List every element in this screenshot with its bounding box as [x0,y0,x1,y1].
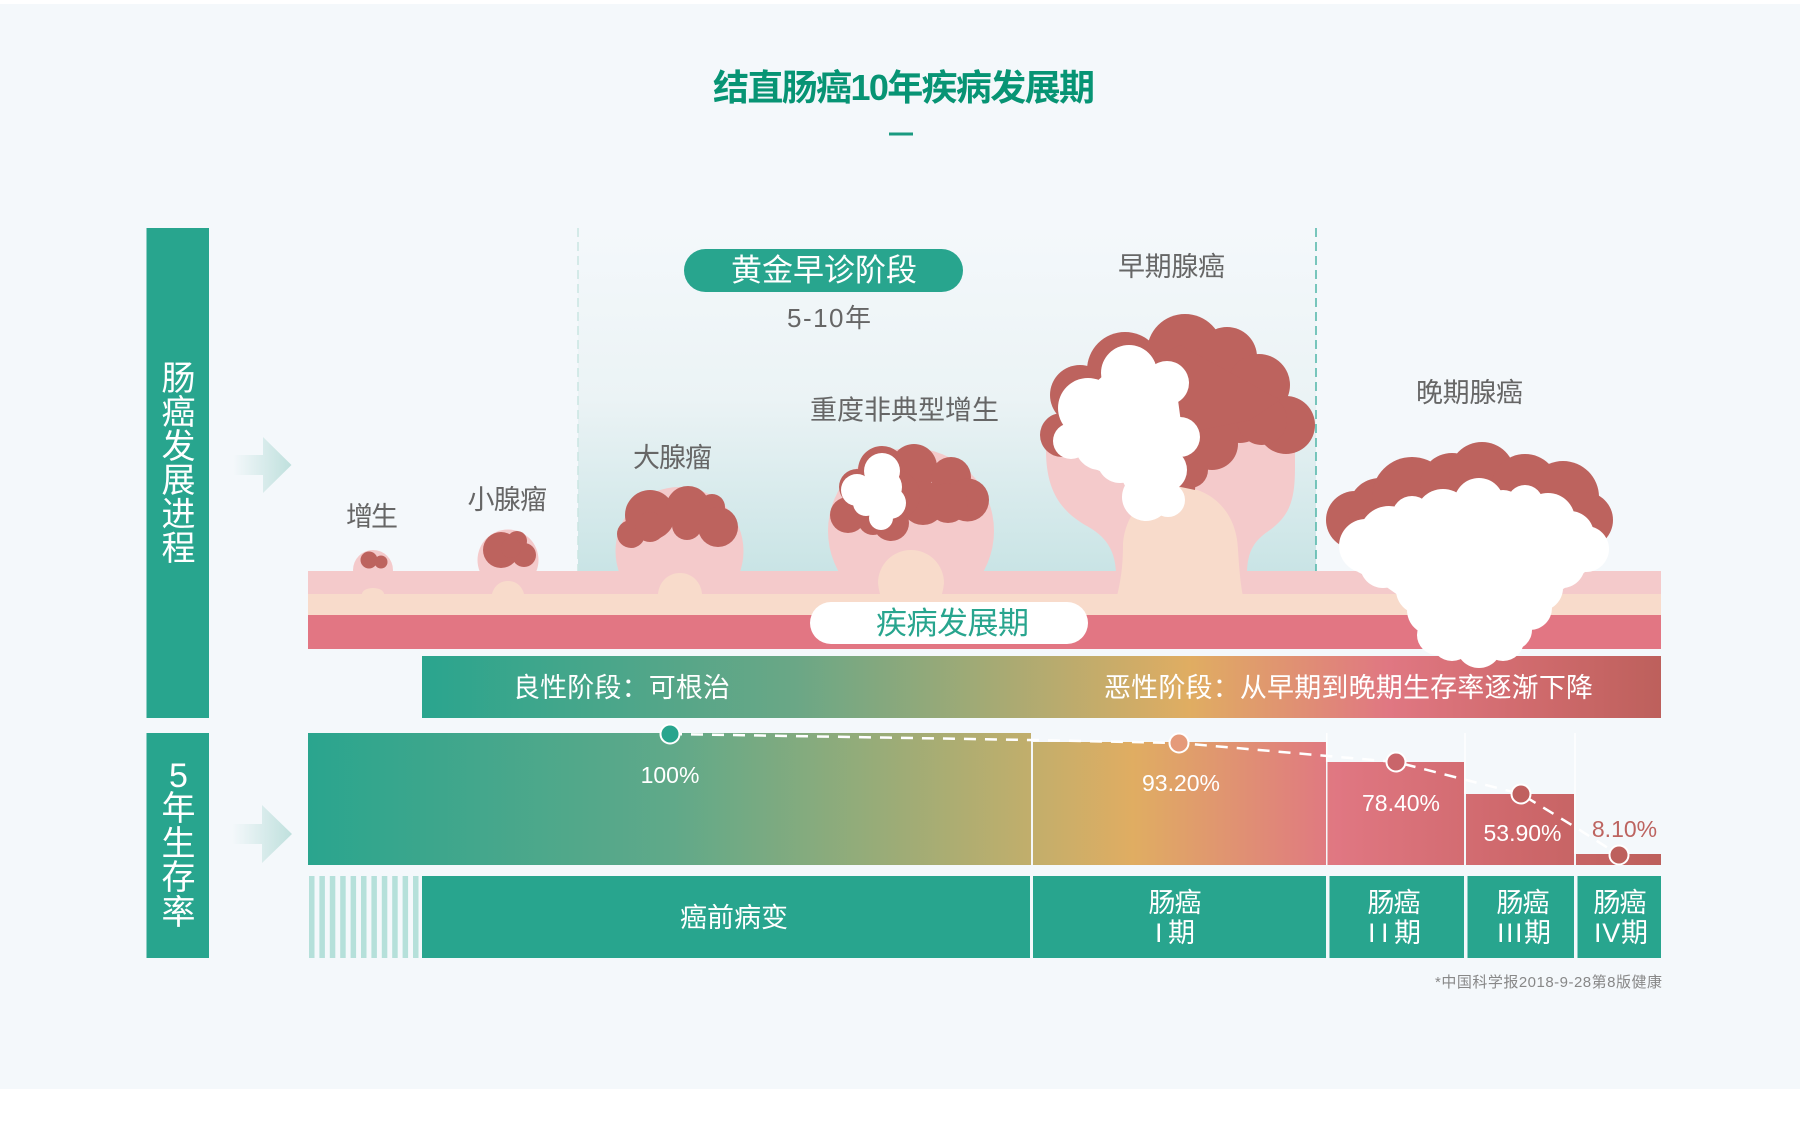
title: 结直肠癌10年疾病发展期 [713,67,1095,108]
polyp: large adenoma [617,486,738,548]
left label: progression: 癌 [162,394,196,432]
golden early diagnosis zone background [578,228,1316,571]
stage labels: 大腺瘤 [633,443,712,473]
stage I: 肠癌 [1148,888,1202,918]
polyp: hyperplasia [360,552,388,568]
stage III: III期 [1497,918,1551,948]
stage II [1330,876,1464,958]
polyp: severe atypical hyperplasia [830,444,989,541]
left label: progression: 展 [162,462,196,500]
stage II: I I 期 [1368,918,1421,948]
polyp: late adenocarcinoma red rim [1326,442,1613,549]
stage IV: IV期 [1594,918,1648,948]
stage: precancerous [422,876,1030,958]
stage stripes [309,876,418,958]
left label: progression: 程 [162,530,196,568]
polyp: small adenoma [483,531,536,568]
source note: *中国科学报2018-9-28第8版健康 [1435,973,1662,991]
benign to malignant bar: 恶性阶段：从早期到晚期生存率逐渐下降 [1104,673,1593,703]
survival trend dashed line [670,734,1619,855]
polyp pink bases [353,432,1295,615]
polyp peach cores [362,487,1242,594]
polyp: late adenocarcinoma white mass [1339,478,1609,668]
disease development pill [810,602,1088,644]
stage III: 肠癌 [1496,888,1550,918]
stage III [1468,876,1574,958]
survival values [641,762,1657,846]
arrow: progression [233,437,292,493]
polyp: early adenocarcinoma [1040,314,1315,521]
stage IV: 肠癌 [1594,888,1646,918]
title [713,67,1095,136]
stage labels: 增生 [346,502,398,532]
left label: progression: 进 [162,496,196,534]
stage II: 肠癌 [1368,888,1420,918]
survival values: 8.10% [1592,816,1657,842]
survival bar chart [308,733,1661,865]
survival values: 93.20% [1142,770,1220,796]
survival values: 78.40% [1362,790,1440,816]
benign to malignant bar [422,656,1661,718]
stage labels: 重度非典型增生 [810,396,999,426]
left label: five year survival: 年 [162,790,196,828]
disease development pill: 疾病发展期 [876,606,1029,641]
survival values: 53.90% [1483,820,1562,846]
stage I: I 期 [1155,918,1195,948]
arrow: survival [232,805,292,863]
stage I [1033,876,1326,958]
stage labels: 小腺瘤 [468,485,547,515]
left label: five year survival: 率 [162,894,196,932]
golden early diagnosis pill: 黄金早诊阶段 [731,253,917,288]
left label: progression: 肠 [162,360,196,398]
stage labels: 早期腺癌 [1118,252,1225,282]
left label: progression [146,228,209,718]
stage IV [1578,876,1661,958]
survival values: 100% [641,762,699,788]
left label: progression: 发 [162,428,196,466]
benign to malignant bar: 良性阶段：可根治 [513,673,730,703]
left label: five year survival: 5 [169,757,188,795]
tissue layers [308,571,1661,649]
stage labels: 晚期腺癌 [1416,378,1523,408]
left label: five year survival [146,733,209,958]
left label: five year survival: 存 [162,859,196,897]
stage: precancerous: 癌前病变 [680,903,788,933]
stage labels [346,252,1523,532]
golden early diagnosis pill [684,249,963,292]
left label: five year survival: 生 [162,825,196,863]
5-10 years label: 5-10年 [787,303,871,333]
survival data points [660,724,1628,864]
